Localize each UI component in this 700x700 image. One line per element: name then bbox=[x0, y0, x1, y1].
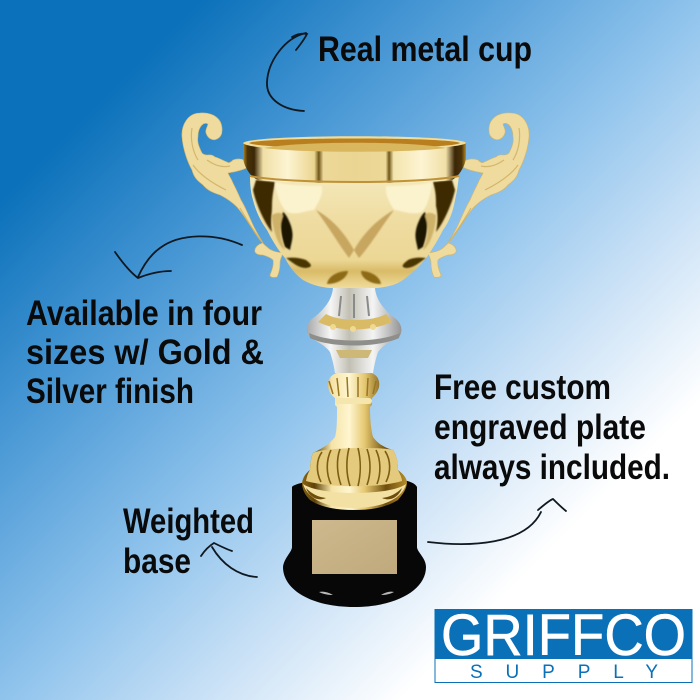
logo frame bbox=[435, 610, 692, 682]
text: Free custom bbox=[434, 368, 611, 407]
engraving plate bbox=[312, 520, 397, 574]
text: Weighted bbox=[123, 502, 254, 541]
gold stem bbox=[302, 373, 407, 510]
callout: engraved plate bbox=[428, 368, 670, 544]
logo: Griffco Supply bbox=[435, 603, 692, 683]
logo blue band bbox=[435, 609, 692, 659]
callout: sizes: Silver finish bbox=[26, 372, 194, 411]
bowl rim band bbox=[243, 143, 466, 183]
trophy cup bbox=[182, 113, 529, 607]
bowl reflections bbox=[253, 180, 455, 284]
arrow bbox=[428, 499, 566, 544]
arrow bbox=[201, 543, 257, 577]
callout: sizes bbox=[26, 236, 264, 411]
callout: real metal cup bbox=[267, 30, 532, 111]
text: Real metal cup bbox=[318, 30, 532, 69]
bowl body bbox=[250, 175, 459, 288]
right handle bbox=[428, 113, 529, 277]
logo subline: SUPPLY bbox=[470, 662, 658, 683]
callout: engraved plate: engraved plate bbox=[434, 408, 646, 447]
callout: sizes: sizes w/ Gold & bbox=[26, 333, 264, 372]
left handle bbox=[182, 113, 283, 277]
callout: weighted base: base bbox=[123, 542, 191, 581]
logo wordmark: GRIFFCO bbox=[441, 603, 686, 668]
text: Available in four bbox=[26, 294, 262, 333]
bowl opening bbox=[243, 136, 466, 151]
callout: weighted base bbox=[123, 502, 257, 581]
arrow bbox=[267, 33, 307, 111]
silver knob bbox=[307, 288, 401, 373]
black base bbox=[283, 477, 426, 607]
arrow bbox=[115, 236, 242, 278]
